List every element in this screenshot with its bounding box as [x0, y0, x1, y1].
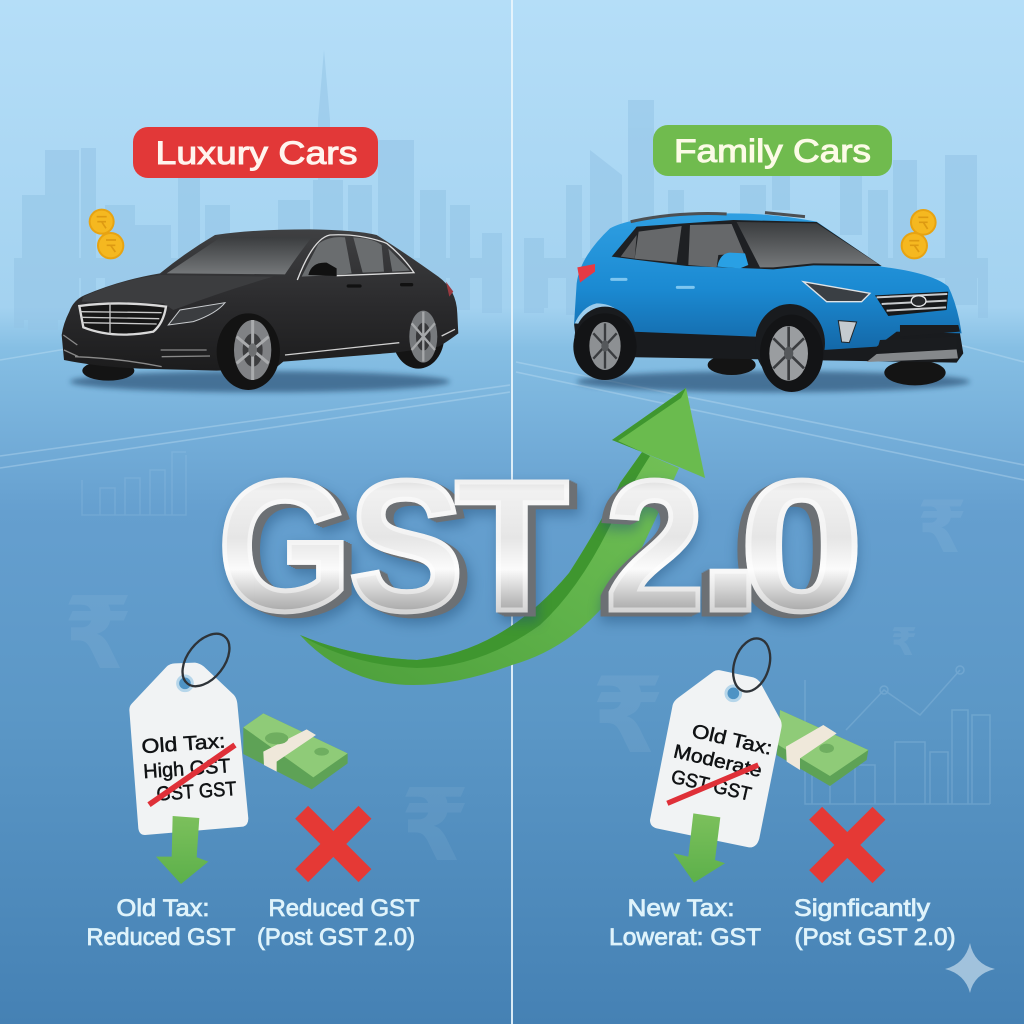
- city skyline: right: [524, 100, 988, 318]
- mirror: [308, 263, 337, 276]
- caption: left reduced gst: [257, 895, 420, 951]
- cash bundle: [243, 713, 348, 789]
- quarter window: [388, 248, 410, 272]
- sedan body: [62, 229, 458, 371]
- price tag: [129, 663, 248, 835]
- rupee watermarks: ₹: [917, 488, 967, 568]
- tag text: High GST: [143, 755, 231, 783]
- caption: right significantly: (Post GST 2.0): [794, 924, 956, 951]
- rear wheel tyre: [392, 303, 444, 369]
- green down arrow: [156, 816, 208, 884]
- lower bumper: [877, 325, 960, 352]
- badge: family cars: Family Cars: [674, 133, 871, 169]
- bumper details: [63, 335, 210, 367]
- headlight: [168, 303, 225, 325]
- tag text: [666, 718, 774, 808]
- car: black luxury sedan: [62, 229, 458, 392]
- red cross: [816, 813, 879, 877]
- left tax tag group: [129, 625, 365, 884]
- rupee watermarks: ₹: [63, 578, 133, 690]
- caption: right new tax: New Tax:: [628, 895, 734, 922]
- tag text: Old Tax:: [690, 721, 774, 760]
- car shadow: [70, 371, 450, 392]
- mirror: [717, 253, 748, 268]
- suv body: [574, 213, 962, 350]
- caption: right new tax: Lowerat: GST: [609, 924, 761, 951]
- tag hole: [178, 676, 192, 691]
- car: blue family SUV: [573, 213, 970, 392]
- tag text: [141, 730, 237, 806]
- wheel arches: [574, 304, 825, 383]
- title word: 2.0: [595, 376, 864, 666]
- front door glass: [688, 224, 744, 267]
- windshield: [737, 222, 878, 267]
- grille: [875, 292, 948, 316]
- center divider: [511, 0, 513, 1024]
- windshield: [167, 237, 312, 274]
- arrow shaft: [300, 452, 679, 685]
- title: GST 2.0: [217, 376, 864, 666]
- hood highlight: [82, 275, 273, 310]
- far wheels: [708, 355, 946, 385]
- sparkle: [945, 943, 995, 993]
- faint bar chart: left: [82, 452, 186, 515]
- city skyline: left: [14, 50, 502, 330]
- rear wheel: [409, 311, 437, 363]
- green down arrow: [673, 813, 725, 883]
- tag hole: [726, 686, 741, 701]
- rear wheel: [573, 313, 637, 380]
- coins: left: [90, 210, 123, 258]
- fog lamp: [838, 321, 857, 343]
- caption: left old tax: [86, 895, 236, 951]
- tag text: GST GST: [156, 778, 237, 806]
- front side window: [302, 237, 352, 277]
- tail light: [446, 282, 453, 297]
- tag text: Old Tax:: [141, 730, 226, 758]
- title word: GST: [217, 443, 585, 650]
- faint bar chart: right: [805, 666, 990, 804]
- title word: 2.0: 2: [605, 443, 705, 650]
- headlight: [803, 282, 870, 302]
- rupee watermarks: [63, 488, 967, 882]
- front wheel: [217, 313, 280, 390]
- rupee watermarks: ₹: [400, 770, 470, 882]
- badge: family cars: [653, 125, 892, 176]
- rear side window: [353, 237, 384, 273]
- title word: GST: T: [455, 443, 569, 650]
- green rising arrow: [300, 388, 705, 685]
- red strike: [149, 745, 235, 805]
- rear door glass: [635, 226, 682, 263]
- cash bundle: [777, 710, 868, 786]
- caption: left reduced gst: Reduced GST: [268, 895, 420, 922]
- rear quarter glass: [621, 235, 637, 259]
- badge: luxury cars: [133, 127, 378, 178]
- road lines: [0, 340, 1024, 480]
- roof rail: [631, 213, 805, 222]
- tag string: [173, 625, 239, 695]
- lower cladding: [574, 323, 963, 363]
- title word: GST: G: [217, 443, 352, 650]
- caption: left old tax: Reduced GST: [86, 924, 236, 951]
- window chrome: [297, 235, 414, 280]
- caption: left reduced gst: (Post GST 2.0): [257, 924, 415, 951]
- rupee watermarks: ₹: [591, 658, 665, 775]
- arrow dark edge: [300, 452, 650, 668]
- arrow head dark side: [612, 388, 686, 452]
- car shadow: [577, 371, 970, 392]
- title word: 2.0: .: [694, 376, 767, 666]
- tail light: [577, 264, 595, 283]
- red cross: [302, 812, 365, 876]
- caption: right significantly: Signficantly: [794, 895, 930, 922]
- door handles: [348, 285, 412, 286]
- badge: luxury cars: Luxury Cars: [156, 135, 358, 171]
- caption: right significantly: [794, 895, 956, 951]
- side trim: [285, 329, 455, 355]
- right tax tag group: [650, 634, 879, 883]
- caption: left old tax: Old Tax:: [116, 895, 210, 922]
- tag text: GST GST: [669, 767, 753, 806]
- arrow head: [612, 388, 705, 478]
- front wheel: [760, 315, 823, 392]
- red strike: [667, 765, 758, 803]
- door handles: [612, 279, 693, 287]
- title word: 2.0: 0: [740, 443, 864, 650]
- caption: right new tax: [609, 895, 761, 951]
- coins: right: [902, 210, 936, 258]
- tag text: Moderate: [671, 741, 764, 782]
- title word: GST: S: [348, 443, 463, 650]
- grille: [79, 303, 166, 335]
- far wheel: [82, 361, 134, 381]
- price tag: [650, 670, 782, 847]
- window frame: [612, 220, 882, 269]
- rupee watermarks: ₹: [891, 622, 917, 664]
- skid plate: [867, 349, 958, 362]
- tag string: [727, 634, 777, 696]
